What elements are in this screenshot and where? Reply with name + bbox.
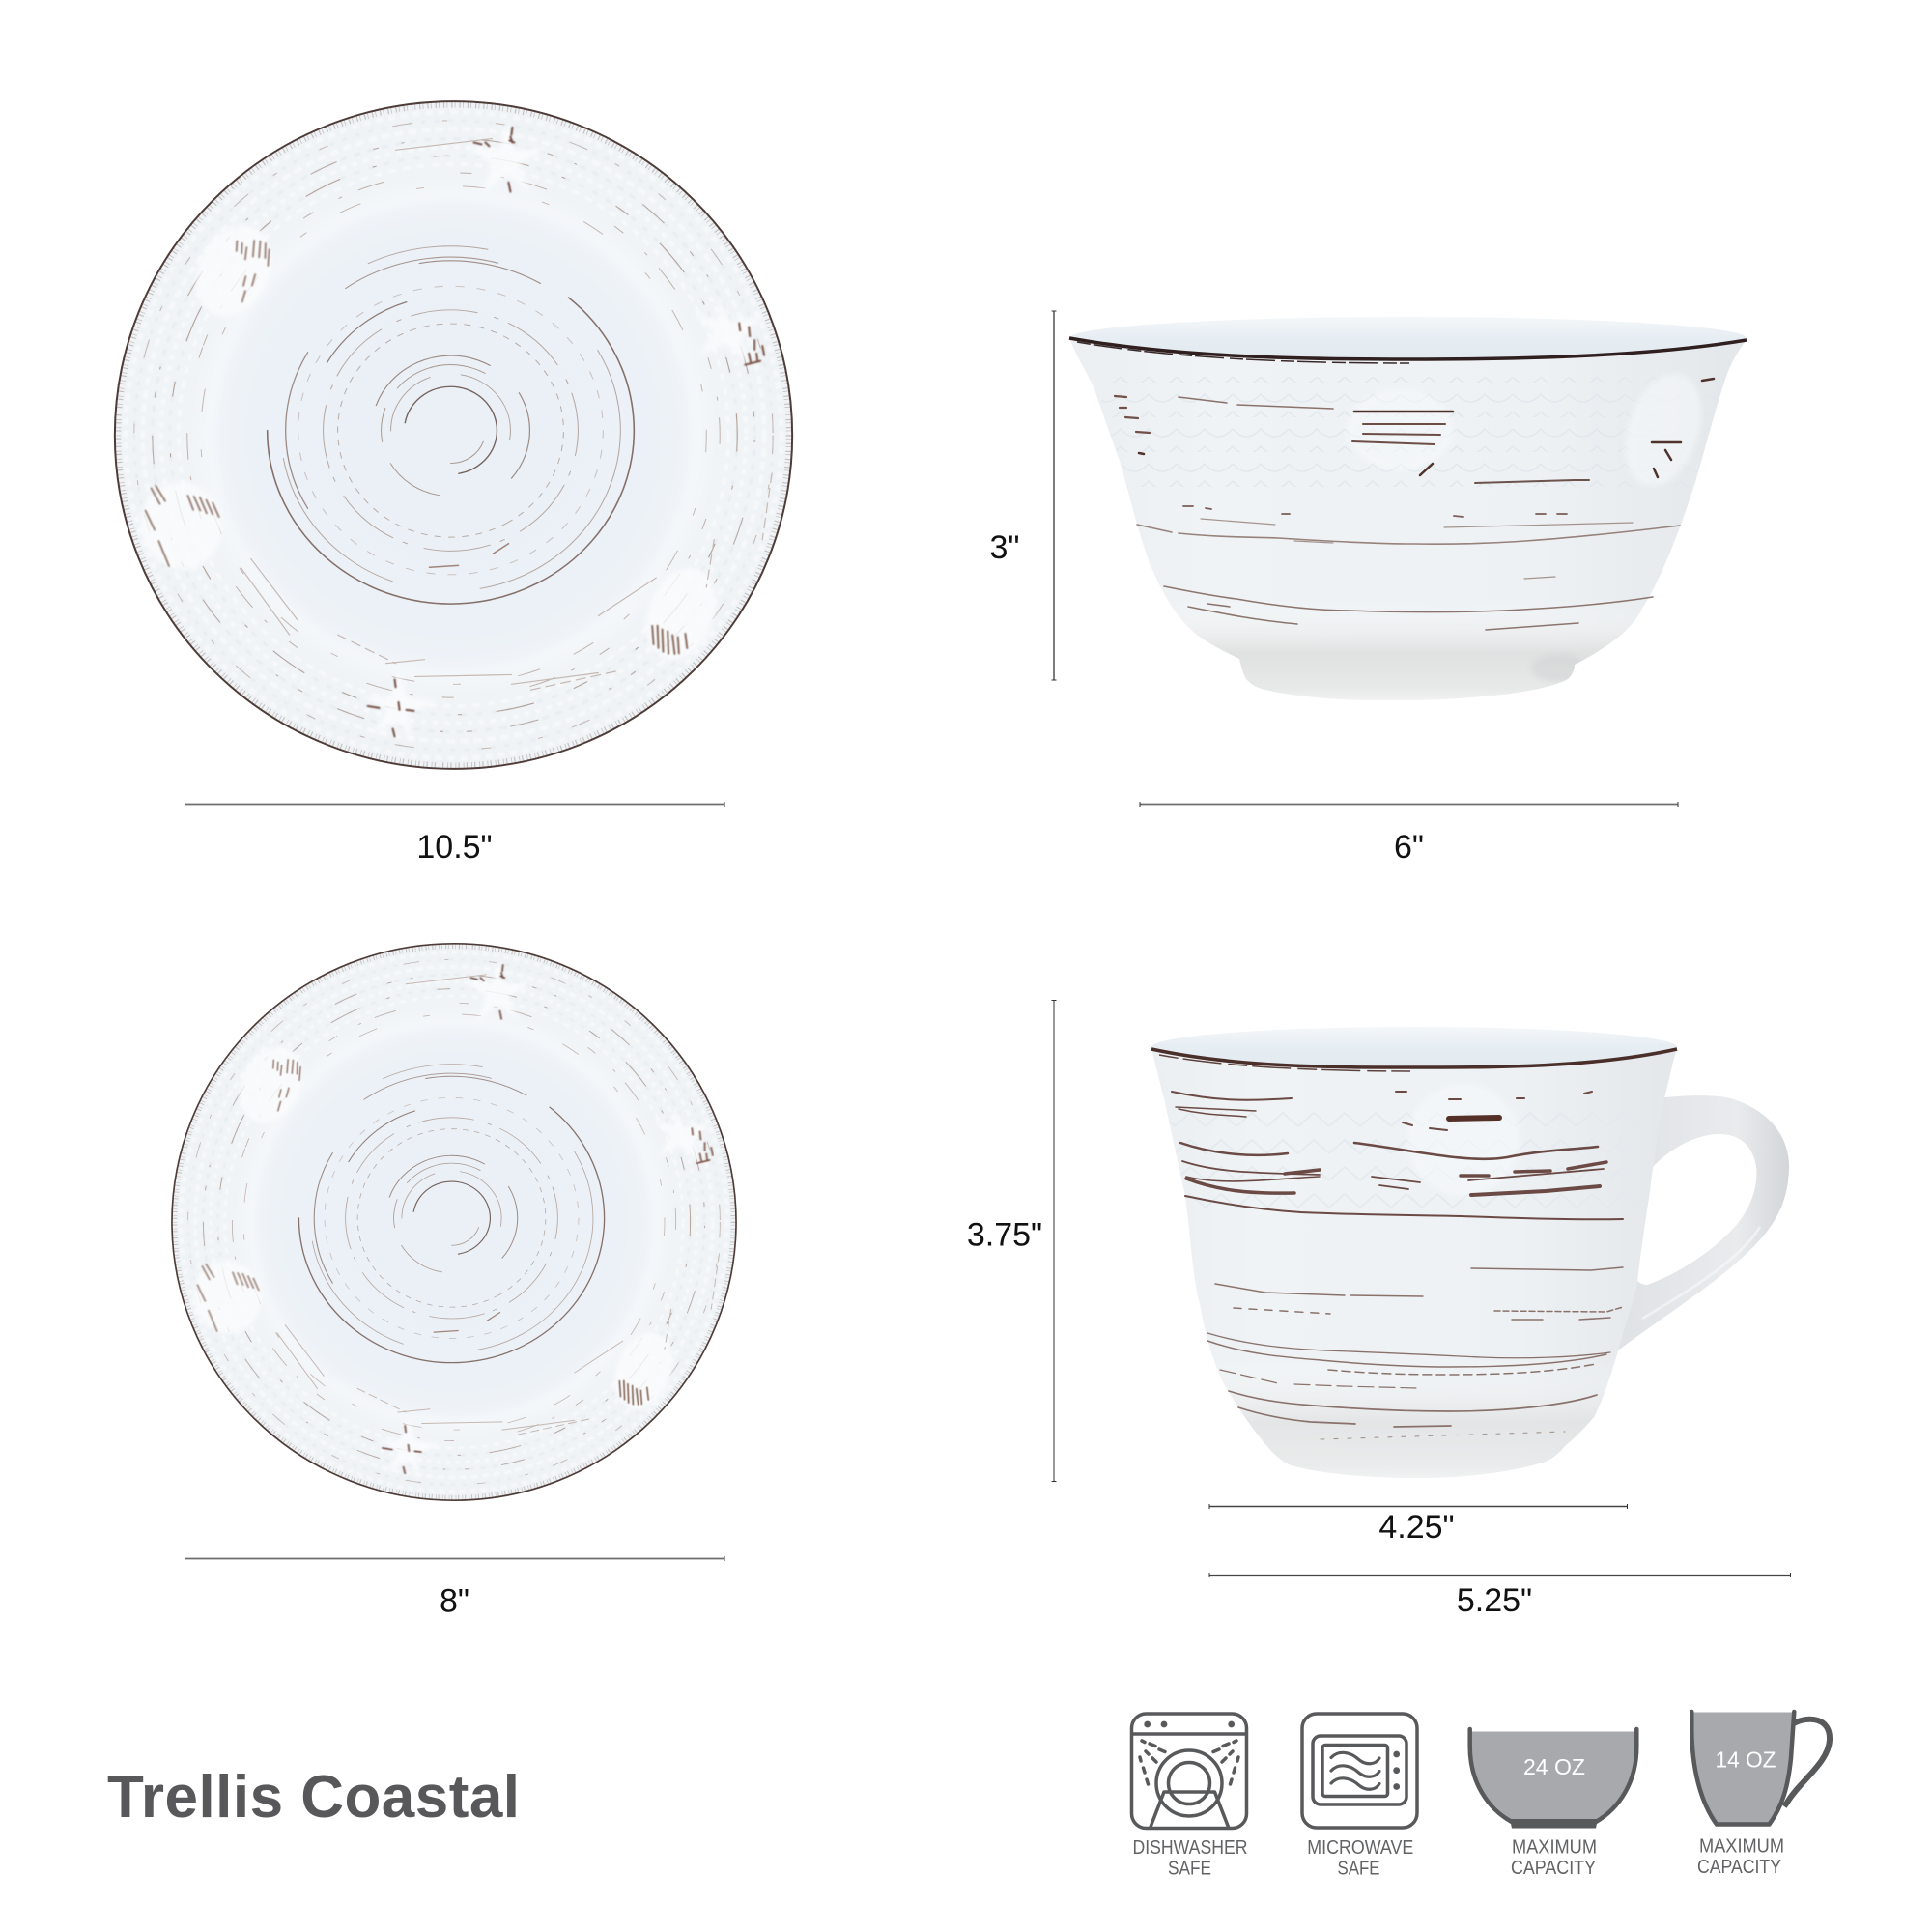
panel: bowl — [990, 311, 1747, 866]
width dimension line 4.25 inches — [1209, 1504, 1627, 1509]
mug shell emboss — [1407, 1084, 1520, 1196]
mug handle — [1615, 1095, 1789, 1352]
label 4.25 inches: 4.25" — [1378, 1509, 1455, 1546]
label 8 inches: 8" — [440, 1582, 469, 1619]
label dishwasher safe: DISHWASHER — [1132, 1837, 1248, 1859]
mug photo illustration — [1151, 1027, 1789, 1478]
height dimension line 3 inches — [1051, 311, 1057, 680]
label microwave safe: SAFE — [1337, 1859, 1379, 1880]
label microwave safe — [1307, 1837, 1413, 1880]
width dimension line 6 inches — [1140, 802, 1678, 807]
icon: microwave safe — [1302, 1714, 1417, 1880]
bowl shell emboss — [1348, 364, 1715, 496]
label 3.75 inches: 3.75" — [967, 1217, 1042, 1254]
capacity value 24 oz: 24 OZ — [1523, 1754, 1585, 1779]
label maximum capacity: CAPACITY — [1697, 1857, 1781, 1878]
bowl distress streaks — [1115, 379, 1714, 630]
panel: mug — [967, 1001, 1791, 1619]
panel: dinner plate — [29, 17, 878, 866]
mug distress streaks — [1172, 1092, 1623, 1439]
icon: bowl capacity — [1470, 1729, 1636, 1879]
title: Trellis Coastal — [107, 1764, 520, 1831]
label dishwasher safe: SAFE — [1168, 1859, 1211, 1880]
label microwave safe: MICROWAVE — [1307, 1837, 1413, 1859]
label 6 inches: 6" — [1394, 829, 1424, 866]
width dimension line 5.25 inches — [1209, 1573, 1791, 1577]
label maximum capacity: MAXIMUM — [1699, 1835, 1784, 1857]
label 3 inches: 3" — [990, 529, 1019, 566]
width dimension line 8 inches — [185, 1556, 724, 1561]
mug body — [1151, 1049, 1677, 1478]
icon: dishwasher safe — [1132, 1714, 1248, 1880]
bowl photo illustration — [1069, 317, 1747, 700]
width dimension line 10.5 inches — [185, 802, 724, 807]
panel: salad plate — [100, 873, 808, 1619]
icon: mug capacity — [1691, 1712, 1830, 1878]
label maximum capacity: MAXIMUM — [1512, 1837, 1597, 1859]
label 5.25 inches: 5.25" — [1457, 1582, 1532, 1619]
label 10.5 inches: 10.5" — [416, 829, 493, 866]
salad plate photo illustration — [100, 873, 808, 1571]
label dishwasher safe — [1132, 1837, 1248, 1880]
label maximum capacity — [1511, 1837, 1597, 1879]
label maximum capacity — [1697, 1835, 1784, 1878]
dinner plate photo illustration — [29, 17, 878, 853]
capacity value 14 oz: 14 OZ — [1716, 1747, 1776, 1772]
label maximum capacity: CAPACITY — [1511, 1858, 1596, 1879]
height dimension line 3.75 inches — [1051, 1001, 1057, 1482]
